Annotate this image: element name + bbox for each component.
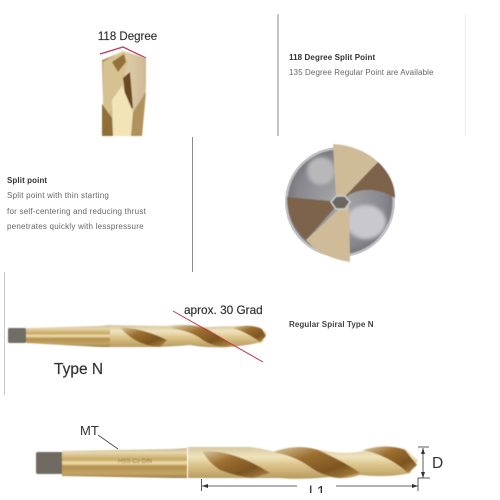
label: aprox. 30 Grad: aprox. 30 Grad — [184, 303, 263, 317]
type N drill image — [8, 303, 267, 378]
dimension: l 1 — [202, 478, 418, 500]
text block: Split point: for self-centering and reducing thrust — [7, 207, 147, 216]
dimension: D: D — [432, 455, 443, 472]
flutes — [120, 327, 167, 347]
text block: Split point: penetrates quickly with lesspressure — [7, 222, 144, 231]
taper shank — [62, 448, 187, 478]
top drill point image — [98, 31, 157, 136]
text block: Split point — [7, 176, 147, 231]
flutes — [202, 451, 270, 478]
divider lines — [4, 14, 466, 395]
text block: Split point: Split point with thin starting — [7, 191, 109, 200]
ground faces — [287, 197, 340, 240]
shank tang — [36, 452, 64, 474]
fluted body — [110, 325, 267, 347]
text block: 118 Degree Split Point: 118 Degree Split Point — [289, 53, 375, 62]
taper shank — [26, 325, 110, 347]
text block: Split point: Split point — [7, 176, 47, 185]
split point end view image — [285, 144, 395, 262]
fluted body — [188, 447, 418, 479]
gold wedges — [333, 144, 378, 197]
callout: MT: MT — [80, 423, 99, 438]
red angle line — [173, 311, 263, 362]
text: Regular Spiral Type N: Regular Spiral Type N — [289, 320, 374, 329]
dimensioned drill drawing: HSS-Co DIN — [118, 459, 152, 465]
label: Type N: Type N — [54, 361, 103, 378]
text block: 118 Degree Split Point: 135 Degree Regular Point are Available — [289, 68, 434, 77]
callout: MT — [80, 423, 118, 449]
text block: 118 Degree Split Point — [289, 53, 434, 77]
shank tang — [8, 328, 26, 343]
center chisel point — [331, 196, 350, 209]
icon: red angle marker — [100, 47, 146, 58]
dimension: D — [418, 447, 443, 478]
drill tip — [102, 51, 146, 136]
dimensioned drill drawing — [36, 423, 443, 500]
heading: 118 Degree: 118 Degree — [98, 31, 157, 43]
